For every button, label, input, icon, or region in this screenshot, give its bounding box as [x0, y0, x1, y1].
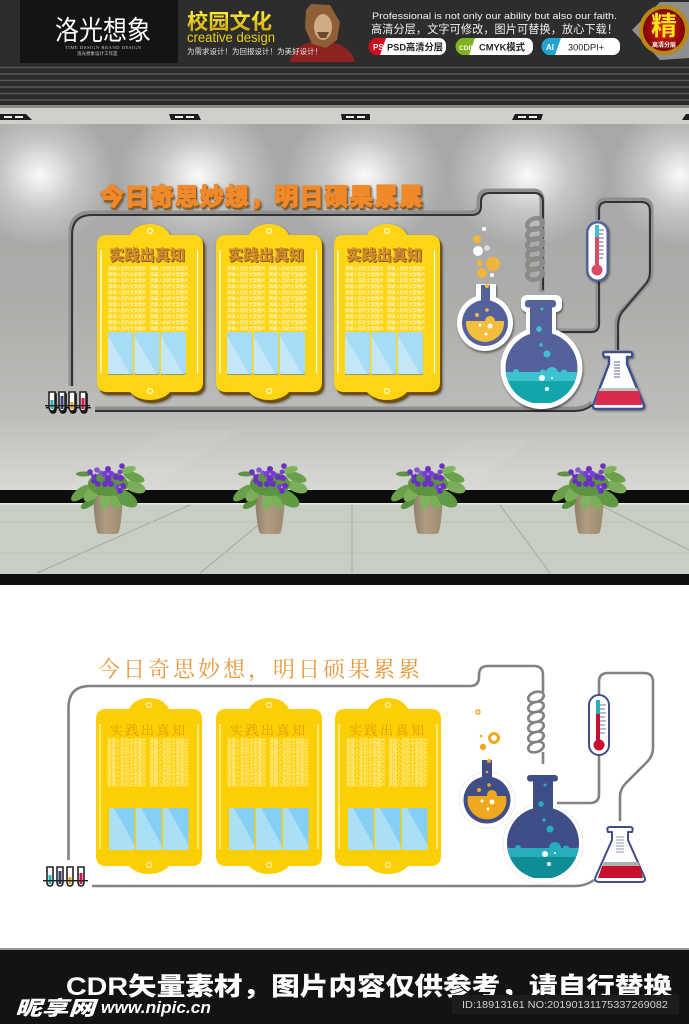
badge: PSD [368, 38, 446, 55]
header bar [0, 0, 689, 63]
panel text: 请输入您的文案图片 请输入您的文案图片 [107, 737, 189, 744]
icon: design big flask [500, 775, 585, 888]
footer bar [0, 948, 689, 1024]
panel title: 实践出真知 [110, 723, 185, 738]
skirting and floor [0, 490, 689, 950]
panel text: 请输入您的文案图片 请输入您的文案图片 [227, 289, 307, 296]
wall scene background [0, 103, 689, 490]
panel text: 请输入您的文案图片 请输入您的文案图片 [108, 319, 188, 326]
panel text: 请输入您的文案图片 请输入您的文案图片 [108, 283, 188, 290]
icon: quality seal: 高清分层 [652, 41, 676, 49]
panel text: 请输入您的文案图片 请输入您的文案图片 [346, 772, 428, 779]
icon: design conical flask [595, 827, 645, 882]
design panel 1 [96, 698, 202, 874]
panel text: 请输入您的文案图片 请输入您的文案图片 [108, 307, 188, 314]
brand slogan: 为需求设计！为回报设计！为美好设计！ [187, 47, 322, 56]
panel text: 请输入您的文案图片 请输入您的文案图片 [227, 301, 307, 308]
badge: 300DPI: AI [546, 43, 554, 52]
panel text: 请输入您的文案图片 请输入您的文案图片 [345, 313, 425, 320]
icon: wall test tubes [45, 392, 90, 411]
badge: 300DPI [542, 38, 620, 55]
panel text: 请输入您的文案图片 请输入您的文案图片 [227, 277, 307, 284]
panel photos [229, 808, 308, 850]
icon: design thermometer [589, 695, 609, 755]
panel text: 请输入您的文案图片 请输入您的文案图片 [107, 750, 189, 757]
icon: quality seal: 精 [651, 11, 677, 41]
panel text: 请输入您的文案图片 请输入您的文案图片 [345, 289, 425, 296]
panel text: 请输入您的文案图片 请输入您的文案图片 [107, 781, 189, 788]
design panel 3 [335, 698, 441, 874]
panel text: 请输入您的文案图片 请输入您的文案图片 [108, 289, 188, 296]
plant 1 [68, 463, 147, 534]
badge: CMYK: CDR [459, 45, 473, 52]
panel text: 请输入您的文案图片 请输入您的文案图片 [346, 737, 428, 744]
icon: wall conical flask [593, 352, 644, 409]
panel text: 请输入您的文案图片 请输入您的文案图片 [227, 313, 307, 320]
panel text: 请输入您的文案图片 请输入您的文案图片 [108, 313, 188, 320]
panel text: 请输入您的文案图片 请输入您的文案图片 [345, 295, 425, 302]
panel text: 请输入您的文案图片 请输入您的文案图片 [227, 319, 307, 326]
panel text: 请输入您的文案图片 请输入您的文案图片 [346, 750, 428, 757]
panel text: 请输入您的文案图片 请输入您的文案图片 [107, 768, 189, 775]
icon: design small flask [459, 759, 515, 828]
wall main pipe [71, 191, 651, 411]
panel text: 请输入您的文案图片 请输入您的文案图片 [108, 277, 188, 284]
panel text: 请输入您的文案图片 请输入您的文案图片 [345, 301, 425, 308]
icon: wall thermometer [586, 221, 609, 282]
tagline chinese: 高清分层，文字可修改，图片可替换，放心下载！ [371, 22, 618, 36]
icon: lion figure [290, 4, 355, 62]
panel text: 请输入您的文案图片 请输入您的文案图片 [107, 755, 189, 762]
panel text: 请输入您的文案图片 请输入您的文案图片 [346, 741, 428, 748]
panel text: 请输入您的文案图片 请输入您的文案图片 [227, 325, 307, 332]
panel text [346, 737, 428, 788]
panel text: 请输入您的文案图片 请输入您的文案图片 [227, 265, 307, 272]
logo block: 洛光想象设计工作室 [77, 50, 118, 57]
panel photos [227, 332, 305, 374]
panel text: 请输入您的文案图片 请输入您的文案图片 [227, 746, 309, 753]
panel text: 请输入您的文案图片 请输入您的文案图片 [227, 271, 307, 278]
ceiling lights [0, 114, 689, 120]
panel photos [345, 332, 423, 374]
panel text: 请输入您的文案图片 请输入您的文案图片 [346, 759, 428, 766]
panel text: 请输入您的文案图片 请输入您的文案图片 [227, 295, 307, 302]
badge: CMYK: CMYK模式 [479, 42, 525, 54]
panel text: 请输入您的文案图片 请输入您的文案图片 [345, 307, 425, 314]
design coil [527, 690, 545, 754]
badge: CMYK [456, 38, 533, 55]
plant 3 [388, 463, 467, 534]
footer notice: CDR矢量素材，图片内容仅供参考，请自行替换 [66, 972, 672, 1001]
icon: quality seal [632, 2, 689, 60]
panel text: 请输入您的文案图片 请输入您的文案图片 [346, 768, 428, 775]
panel text: 请输入您的文案图片 请输入您的文案图片 [227, 772, 309, 779]
panel text: 请输入您的文案图片 请输入您的文案图片 [227, 307, 307, 314]
panel text: 请输入您的文案图片 请输入您的文案图片 [107, 746, 189, 753]
wall panel 3 [334, 224, 440, 400]
wall coil [526, 216, 544, 282]
panel text: 请输入您的文案图片 请输入您的文案图片 [227, 759, 309, 766]
panel text: 请输入您的文案图片 请输入您的文案图片 [227, 750, 309, 757]
panel text: 请输入您的文案图片 请输入您的文案图片 [345, 277, 425, 284]
panel text: 请输入您的文案图片 请输入您的文案图片 [108, 295, 188, 302]
badge: 300DPI: 300DPI+ [568, 42, 604, 54]
panel text: 请输入您的文案图片 请输入您的文案图片 [345, 283, 425, 290]
ceiling stripes [0, 63, 689, 105]
panel text: 请输入您的文案图片 请输入您的文案图片 [227, 763, 309, 770]
panel text: 请输入您的文案图片 请输入您的文案图片 [346, 746, 428, 753]
panel title: 实践出真知 [349, 723, 424, 738]
panel title: 实践出真知 [228, 246, 304, 264]
icon: wall bubbles [473, 227, 500, 278]
panel text: 请输入您的文案图片 请输入您的文案图片 [345, 265, 425, 272]
panel text: 请输入您的文案图片 请输入您的文案图片 [107, 777, 189, 784]
panel text: 请输入您的文案图片 请输入您的文案图片 [227, 781, 309, 788]
panel text: 请输入您的文案图片 请输入您的文案图片 [345, 325, 425, 332]
icon: design test tubes [43, 867, 88, 886]
panel text: 请输入您的文案图片 请输入您的文案图片 [108, 265, 188, 272]
panel text [227, 265, 307, 332]
panel text: 请输入您的文案图片 请输入您的文案图片 [107, 741, 189, 748]
panel text: 请输入您的文案图片 请输入您的文案图片 [345, 271, 425, 278]
logo block: 洛光想象 [55, 16, 151, 46]
design panel 2 [216, 698, 322, 874]
nipic logo: 昵享网 [15, 997, 99, 1020]
wall panel 1 [97, 224, 203, 400]
brand subtitle: creative design [187, 29, 275, 45]
panel text: 请输入您的文案图片 请输入您的文案图片 [107, 772, 189, 779]
nipic url: www.nipic.cn [101, 998, 211, 1017]
logo block [20, 0, 178, 63]
image id: ID:18913161 NO:20190131175337269082 [462, 999, 668, 1011]
logo block: TIME DESIGN BRAND DESIGN [65, 45, 142, 50]
panel text [108, 265, 188, 332]
panel text: 请输入您的文案图片 请输入您的文案图片 [346, 781, 428, 788]
panel text: 请输入您的文案图片 请输入您的文案图片 [107, 759, 189, 766]
badge: PSD: PSD高清分层 [387, 42, 443, 54]
panel text: 请输入您的文案图片 请输入您的文案图片 [346, 777, 428, 784]
panel text: 请输入您的文案图片 请输入您的文案图片 [108, 301, 188, 308]
design heading: 今日奇思妙想，明日硕果累累 [98, 657, 420, 683]
panel text: 请输入您的文案图片 请输入您的文案图片 [227, 768, 309, 775]
panel text: 请输入您的文案图片 请输入您的文案图片 [227, 741, 309, 748]
panel text: 请输入您的文案图片 请输入您的文案图片 [227, 755, 309, 762]
icon: design bubbles [476, 710, 498, 750]
panel photos [109, 808, 188, 850]
panel text: 请输入您的文案图片 请输入您的文案图片 [108, 271, 188, 278]
design pipes [68, 666, 653, 886]
wall panel 2 [216, 224, 322, 400]
panel text: 请输入您的文案图片 请输入您的文案图片 [227, 737, 309, 744]
panel title: 实践出真知 [346, 246, 422, 264]
brand title: 校园文化 [187, 10, 272, 34]
panel photos [348, 808, 428, 850]
panel text: 请输入您的文案图片 请输入您的文案图片 [346, 763, 428, 770]
icon: wall small flask [457, 284, 513, 351]
panel title: 实践出真知 [109, 246, 185, 264]
panel text: 请输入您的文案图片 请输入您的文案图片 [227, 283, 307, 290]
icon: wall big flask [500, 295, 585, 412]
panel title: 实践出真知 [230, 723, 305, 738]
plant 4 [549, 463, 628, 534]
panel text: 请输入您的文案图片 请输入您的文案图片 [345, 319, 425, 326]
panel photos [108, 332, 186, 374]
plant 2 [230, 463, 309, 534]
wall heading: 今日奇思妙想，明日硕果累累 [100, 183, 423, 211]
panel text [227, 737, 309, 788]
panel text: 请输入您的文案图片 请输入您的文案图片 [107, 763, 189, 770]
panel text: 请输入您的文案图片 请输入您的文案图片 [346, 755, 428, 762]
badge: PSD: PS [373, 43, 384, 52]
panel text [107, 737, 189, 788]
panel text: 请输入您的文案图片 请输入您的文案图片 [227, 777, 309, 784]
tagline english: Professional is not only our ability but also our faith. [372, 11, 617, 22]
image id [452, 995, 679, 1014]
panel text: 请输入您的文案图片 请输入您的文案图片 [108, 325, 188, 332]
panel text [345, 265, 425, 332]
